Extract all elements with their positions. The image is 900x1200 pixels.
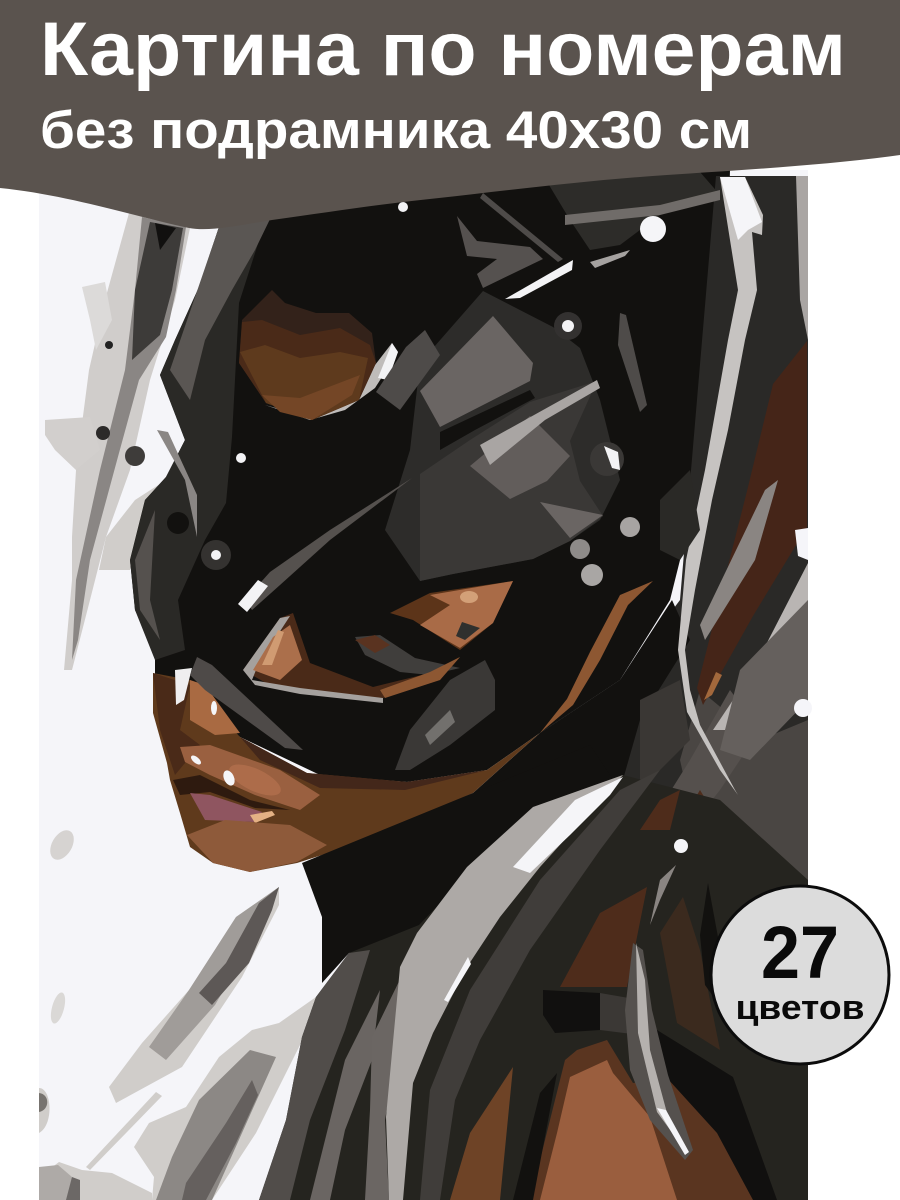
black area between cheek and hair xyxy=(400,600,690,940)
neck xyxy=(302,745,620,983)
lower left grey brush strokes xyxy=(39,887,316,1200)
colour count badge: 27 xyxy=(761,911,839,994)
lower hair xyxy=(259,770,808,1200)
forehead skin patch xyxy=(239,290,376,420)
header banner xyxy=(0,0,900,229)
eye skin patch xyxy=(355,581,513,675)
painting: woman in black mask xyxy=(39,165,812,1200)
subtitle: без подрамника 40х30 см xyxy=(40,101,752,160)
left grey brush strokes xyxy=(45,213,190,1025)
cheek skin line xyxy=(540,581,653,733)
title: Картина по номерам xyxy=(40,7,846,92)
black head silhouette xyxy=(130,165,730,782)
mask highlights xyxy=(167,170,720,770)
lower face and lips xyxy=(153,657,540,872)
dark left edge of head xyxy=(130,200,272,660)
colour count badge xyxy=(711,886,889,1064)
colour count badge: цветов xyxy=(736,989,864,1027)
shoulder skin xyxy=(450,1040,767,1200)
left hair wisps on head xyxy=(135,215,272,640)
grey-white hair strand xyxy=(625,943,693,1160)
right hair brown and grey strands xyxy=(620,176,812,880)
right hair base xyxy=(470,176,808,1200)
nose xyxy=(243,613,460,703)
black shoulder strap xyxy=(543,990,777,1200)
